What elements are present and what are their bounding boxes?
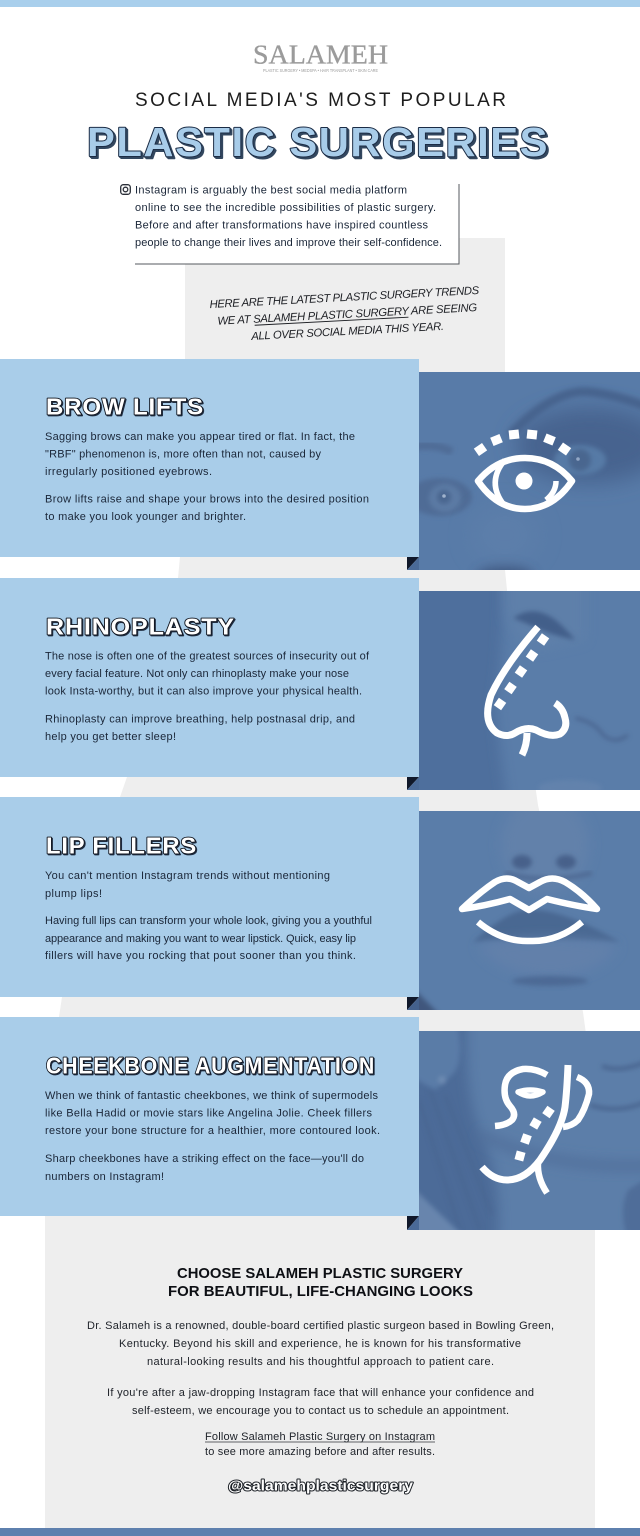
panel: lip fillers xyxy=(0,797,419,997)
text: cheekbone augmentation: Sharp cheekbones have a striking effect on the face—you'll do xyxy=(45,1153,364,1165)
instagram link text xyxy=(205,1431,435,1458)
slanted callout: HERE ARE THE LATEST PLASTIC SURGERY TRENDS xyxy=(209,285,480,311)
closing heading: CHOOSE SALAMEH PLASTIC SURGERY xyxy=(177,1265,463,1282)
text: lip fillers: appearance and making you want to wear lipstick. Quick, easy lip xyxy=(45,933,356,945)
slanted callout: ALL OVER SOCIAL MEDIA THIS YEAR. xyxy=(250,321,444,343)
closing heading xyxy=(168,1265,473,1300)
icon: eye xyxy=(474,430,572,509)
instagram link text: Follow Salameh Plastic Surgery on Instagram xyxy=(205,1431,435,1443)
heading: rhinoplasty: RHINOPLASTY xyxy=(46,614,235,640)
logo: SALAMEH xyxy=(253,40,388,70)
photo: eyes xyxy=(405,372,640,590)
panel: cheekbone augmentation xyxy=(0,1017,419,1216)
text: brow lifts: to make you look younger and brighter. xyxy=(45,511,246,523)
heading: brow lifts: BROW LIFTS xyxy=(46,394,204,420)
top colour bar xyxy=(0,0,640,7)
photo: nose xyxy=(407,591,640,790)
intro block xyxy=(121,178,459,264)
text: brow lifts: Sagging brows can make you appear tired or flat. In fact, the xyxy=(45,431,355,443)
photo: lips xyxy=(407,811,640,1010)
text: lip fillers: plump lips! xyxy=(45,888,102,900)
text: rhinoplasty: look Insta-worthy, but it can also improve your physical health. xyxy=(45,686,362,698)
title line one: SOCIAL MEDIA'S MOST POPULAR xyxy=(135,90,506,111)
text: lip fillers: You can't mention Instagram trends without mentioning xyxy=(45,870,330,882)
intro block: online to see the incredible possibilities of plastic surgery. xyxy=(135,202,436,214)
text: lip fillers: fillers will have you rocking that pout sooner than you think. xyxy=(45,950,356,962)
text: brow lifts xyxy=(45,431,369,523)
instagram handle: @salamehplasticsurgery xyxy=(228,1478,414,1494)
intro block: Instagram is arguably the best social media platform xyxy=(135,184,407,196)
heading: cheekbone augmentation: CHEEKBONE AUGMENTATION xyxy=(46,1052,375,1078)
text: cheekbone augmentation: When we think of fantastic cheekbones, we think of supermodels xyxy=(45,1090,378,1102)
background gray shape xyxy=(45,238,595,1528)
photo: cheek xyxy=(407,1031,640,1230)
heading: lip fillers: LIP FILLERS xyxy=(46,832,197,858)
intro block: Before and after transformations have inspired countless xyxy=(135,220,428,232)
text: brow lifts: Brow lifts raise and shape your brows into the desired position xyxy=(45,494,369,506)
closing heading: FOR BEAUTIFUL, LIFE-CHANGING LOOKS xyxy=(168,1283,473,1300)
text: rhinoplasty: The nose is often one of the greatest sources of insecurity out of xyxy=(45,650,370,662)
main title: PLASTIC SURGERIES xyxy=(87,119,549,165)
bottom colour bar xyxy=(0,1528,640,1536)
closing text xyxy=(87,1320,554,1417)
text: lip fillers: Having full lips can transform your whole look, giving you a youthful xyxy=(45,915,372,927)
closing text: self-esteem, we encourage you to contact us to schedule an appointment. xyxy=(132,1405,509,1417)
icon: instagram xyxy=(121,185,130,194)
text: cheekbone augmentation: restore your bone structure for a healthier, more contoured look. xyxy=(45,1125,380,1137)
text: lip fillers xyxy=(45,870,372,962)
text: cheekbone augmentation: numbers on Instagram! xyxy=(45,1171,164,1183)
icon: lips xyxy=(462,878,597,941)
closing text: Kentucky. Beyond his skill and experience, he is known for his transformative xyxy=(119,1338,521,1350)
slanted callout: WE AT SALAMEH PLASTIC SURGERY ARE SEEING xyxy=(217,302,478,328)
instagram link text: to see more amazing before and after results. xyxy=(205,1446,435,1458)
text: rhinoplasty: help you get better sleep! xyxy=(45,731,176,743)
panel: brow lifts xyxy=(0,359,419,557)
text: rhinoplasty: Rhinoplasty can improve breathing, help postnasal drip, and xyxy=(45,714,355,726)
text: rhinoplasty xyxy=(45,650,370,743)
closing text: natural-looking results and his thoughtful approach to patient care. xyxy=(147,1356,494,1368)
logo: PLASTIC SURGERY • MEDSPA • HAIR TRANSPLANT • SKIN CARE xyxy=(263,68,378,73)
icon: nose xyxy=(488,627,566,755)
closing text: If you're after a jaw-dropping Instagram face that will enhance your confidence and xyxy=(107,1387,534,1399)
closing text: Dr. Salameh is a renowned, double-board certified plastic surgeon based in Bowling Green, xyxy=(87,1320,554,1332)
text: brow lifts: irregularly positioned eyebrows. xyxy=(45,466,212,478)
text: rhinoplasty: every facial feature. Not only can rhinoplasty make your nose xyxy=(45,668,349,680)
slanted callout xyxy=(209,285,482,345)
text: cheekbone augmentation xyxy=(45,1090,380,1183)
intro block: people to change their lives and improve their self-confidence. xyxy=(135,237,442,249)
text: cheekbone augmentation: like Bella Hadid or movie stars like Angelina Jolie. Cheek fillers xyxy=(45,1108,372,1120)
icon: face profile xyxy=(482,1065,589,1193)
text: brow lifts: "RBF" phenomenon is, more often than not, caused by xyxy=(45,448,322,460)
panel: rhinoplasty xyxy=(0,578,419,777)
